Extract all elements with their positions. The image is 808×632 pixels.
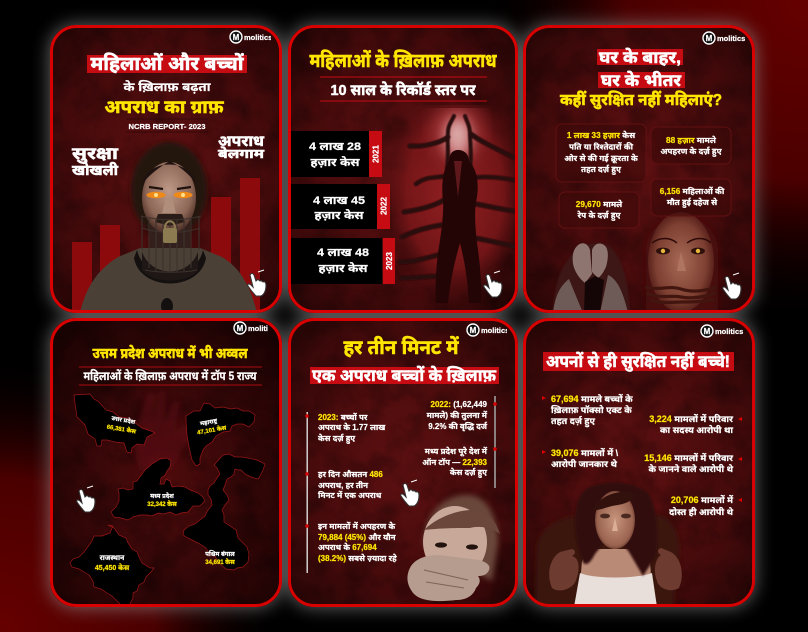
stats right: 20,706 मामलों में (671, 494, 734, 505)
stats left: 39,076 मामलों में \ (551, 447, 619, 458)
stats left (542, 392, 633, 469)
year bar 2023: हज़ार केस (318, 261, 368, 275)
stat box: dowry deaths: मौत हुई दहेज से (667, 197, 718, 208)
logo: molitics: M (706, 34, 713, 43)
stats right: 15,146 मामलों में परिवार (644, 452, 734, 463)
stats left: 67,694 मामले बच्चों के (551, 392, 633, 404)
source label: NCRB REPORT- 2023 (128, 124, 206, 131)
panel: children not safe from own people (523, 318, 755, 607)
timeline right: केस दर्ज़ हुए (450, 467, 487, 478)
timeline left: (38.2%) सबसे ज़्यादा रहे (318, 554, 397, 563)
stat box: cruelty: 1 लाख 33 हज़ार केस (567, 131, 636, 140)
illustration: woman with chained mouth (645, 212, 718, 313)
illustration: crying woman (553, 243, 630, 313)
timeline left: अपराध के 1.77 लाख (318, 423, 386, 432)
logo: molitics (234, 322, 276, 334)
map: Rajasthan: 45,450 केस (95, 564, 130, 572)
map: Uttar Pradesh: 66,381 केस (106, 423, 137, 436)
map: Maharashtra: महाराष्ट्र (200, 418, 218, 427)
heading highlights (597, 47, 685, 90)
timeline left: मिनट में एक अपराध (318, 490, 382, 500)
stats right: के जानने वाले आरोपी थे (648, 462, 734, 474)
cursor icon (248, 270, 266, 296)
year bar 2022: 4 लाख 45 (313, 195, 365, 207)
stat box: rape (559, 192, 639, 228)
slogan left: सुरक्षा (72, 144, 119, 164)
logo: molitics: M (233, 33, 240, 42)
map: Maharashtra (186, 403, 255, 466)
timeline right: ऑन टॉप — 22,393 (422, 457, 488, 467)
timeline left: 79,884 (45%) और यौन (318, 533, 397, 542)
year bar 2022 (285, 184, 390, 229)
logo: molitics (230, 31, 272, 43)
illustration: figure with many arms (392, 105, 518, 303)
timeline right (422, 396, 497, 488)
stats left: आरोपी जानकार थे (551, 457, 617, 469)
cursor icon (723, 273, 741, 299)
cursor icon (484, 271, 502, 297)
source label (126, 119, 208, 132)
map: Maharashtra: 47,101 केस (196, 423, 227, 437)
logo: molitics: M (237, 324, 244, 333)
stats left: तहत दर्ज़ हुए (551, 415, 595, 428)
stat box: cruelty: पति या रिश्तेदारों की (569, 142, 634, 152)
panel: ten year record (285, 25, 518, 313)
map: Madhya Pradesh (111, 458, 205, 520)
logo: molitics (701, 325, 743, 337)
stat box: rape: रेप के दर्ज़ हुए (577, 210, 621, 221)
heading highlights: घर के भीतर (601, 70, 682, 90)
logo: molitics: M (469, 34, 476, 43)
year bar 2021 (285, 131, 382, 177)
year bar 2022: हज़ार केस (314, 208, 364, 222)
map: West Bengal: पश्चिम बंगाल (205, 550, 235, 558)
stats left: ख़िलाफ़ पॉक्सो एक्ट के (551, 403, 632, 415)
logo: molitics: molitics (481, 326, 509, 335)
stats right (644, 413, 742, 517)
stats right: 3,224 मामलों में परिवार (649, 413, 734, 424)
stat box: cruelty (556, 124, 646, 182)
panel: crime against children every three minutes (288, 318, 518, 607)
subheading with rules (320, 77, 487, 101)
year bar 2021: हज़ार केस (310, 155, 360, 169)
slogan right: अपराध (218, 133, 265, 150)
panel: top five states map (50, 318, 282, 608)
illustration: girl held by man's hands (535, 482, 682, 607)
heading highlight: महिलाओं और बच्चों (90, 52, 245, 75)
slogan left (72, 144, 119, 178)
timeline left (305, 412, 397, 573)
timeline left: अपराध के 67,694 (318, 543, 377, 552)
cursor icon (401, 480, 419, 506)
stat box: kidnapping: अपहरण के दर्ज़ हुए (660, 146, 723, 157)
slogan right: बेलगाम (218, 146, 265, 161)
subheading with rules: 10 साल के रिकॉर्ड स्तर पर (330, 81, 476, 99)
stat box: cruelty: ओर से की गई क्रूरता के (564, 153, 638, 164)
illustration: child with covered mouth (407, 495, 500, 601)
stat box: kidnapping: 88 हज़ार मामले (666, 136, 717, 145)
logo: molitics: M (470, 326, 477, 335)
bar chart: rising crime (72, 178, 260, 313)
panel: women and children crime graph (50, 25, 282, 314)
stat box: cruelty: तहत दर्ज़ हुए (581, 164, 622, 175)
timeline right: 9.2% की वृद्धि दर्ज (428, 421, 488, 431)
map: Rajasthan: राजस्थान (100, 555, 125, 562)
logo: molitics (703, 32, 745, 44)
stat box: kidnapping (651, 127, 731, 164)
year bar 2021: 4 लाख 28 (309, 141, 361, 153)
heading highlights: घर के बाहर, (599, 47, 681, 67)
stat box: dowry deaths: 6,156 महिलाओं की (660, 186, 725, 196)
stat box: dowry deaths (651, 179, 731, 216)
map: Rajasthan (70, 525, 154, 608)
map: Uttar Pradesh: उत्तर प्रदेश (111, 414, 136, 426)
year bar 2022: 2022 (380, 197, 388, 215)
stat box: rape: 29,670 मामले (576, 200, 623, 209)
subheading with rules: महिलाओं के ख़िलाफ़ अपराध में टॉप 5 राज्य (84, 368, 257, 383)
year bar 2023 (285, 238, 395, 284)
map: Madhya Pradesh: मध्य प्रदेश (150, 492, 174, 500)
year bar 2023: 4 लाख 48 (317, 247, 369, 259)
map: Uttar Pradesh (74, 394, 155, 453)
year bar 2023: 2023 (385, 252, 394, 270)
timeline right: मामले) की तुलना में (427, 410, 488, 421)
cursor icon (77, 486, 95, 512)
timeline right: मध्य प्रदेश पूरे देश में (425, 446, 488, 457)
logo: molitics: molitics (244, 33, 272, 42)
logo: molitics: molitics (715, 327, 743, 336)
timeline left: इन मामलों में अपहरण के (318, 521, 395, 531)
logo: molitics: molitics (480, 34, 508, 43)
logo: molitics: molitics (248, 324, 276, 333)
map: Madhya Pradesh: 32,342 केस (147, 500, 177, 508)
heading: हर तीन मिनट में (344, 335, 459, 359)
timeline left: 2023: बच्चों पर (318, 412, 368, 422)
logo: molitics (466, 32, 508, 44)
logo: molitics: molitics (717, 34, 745, 43)
heading: उत्तम प्रदेश अपराध में भी अव्वल (92, 344, 248, 361)
heading highlight: एक अपराध बच्चों के ख़िलाफ़ (312, 365, 497, 385)
yellow heading: अपराध का ग्राफ़ (104, 97, 225, 117)
slogan right (218, 133, 265, 161)
stats right: दोस्त ही आरोपी थे (669, 505, 734, 517)
timeline left: हर दिन औसतन 486 (318, 470, 383, 479)
year bar 2021: 2021 (372, 145, 380, 163)
map: West Bengal: 34,691 केस (205, 558, 235, 566)
heading: महिलाओं के ख़िलाफ़ अपराध (310, 49, 497, 72)
yellow heading: कहीं सुरक्षित नहीं महिलाएं? (560, 90, 722, 110)
timeline left: अपराध, हर तीन (318, 481, 369, 490)
logo: molitics (467, 324, 509, 336)
heading highlight: अपनों से ही सुरक्षित नहीं बच्चे! (546, 351, 730, 372)
timeline left: केस दर्ज़ हुए (318, 433, 355, 444)
subheading with rules (79, 367, 262, 385)
subheading: के ख़िलाफ़ बढ़ता (124, 79, 211, 94)
illustration: woman with caged mouth (80, 142, 257, 314)
slogan left: खोखली (72, 162, 119, 178)
panel: women not safe (523, 25, 755, 313)
timeline right: 2022: (1,62,449 (430, 400, 488, 409)
logo: molitics: M (704, 327, 711, 336)
map: West Bengal (183, 454, 265, 570)
stats right: का सदस्य आरोपी था (660, 424, 733, 435)
